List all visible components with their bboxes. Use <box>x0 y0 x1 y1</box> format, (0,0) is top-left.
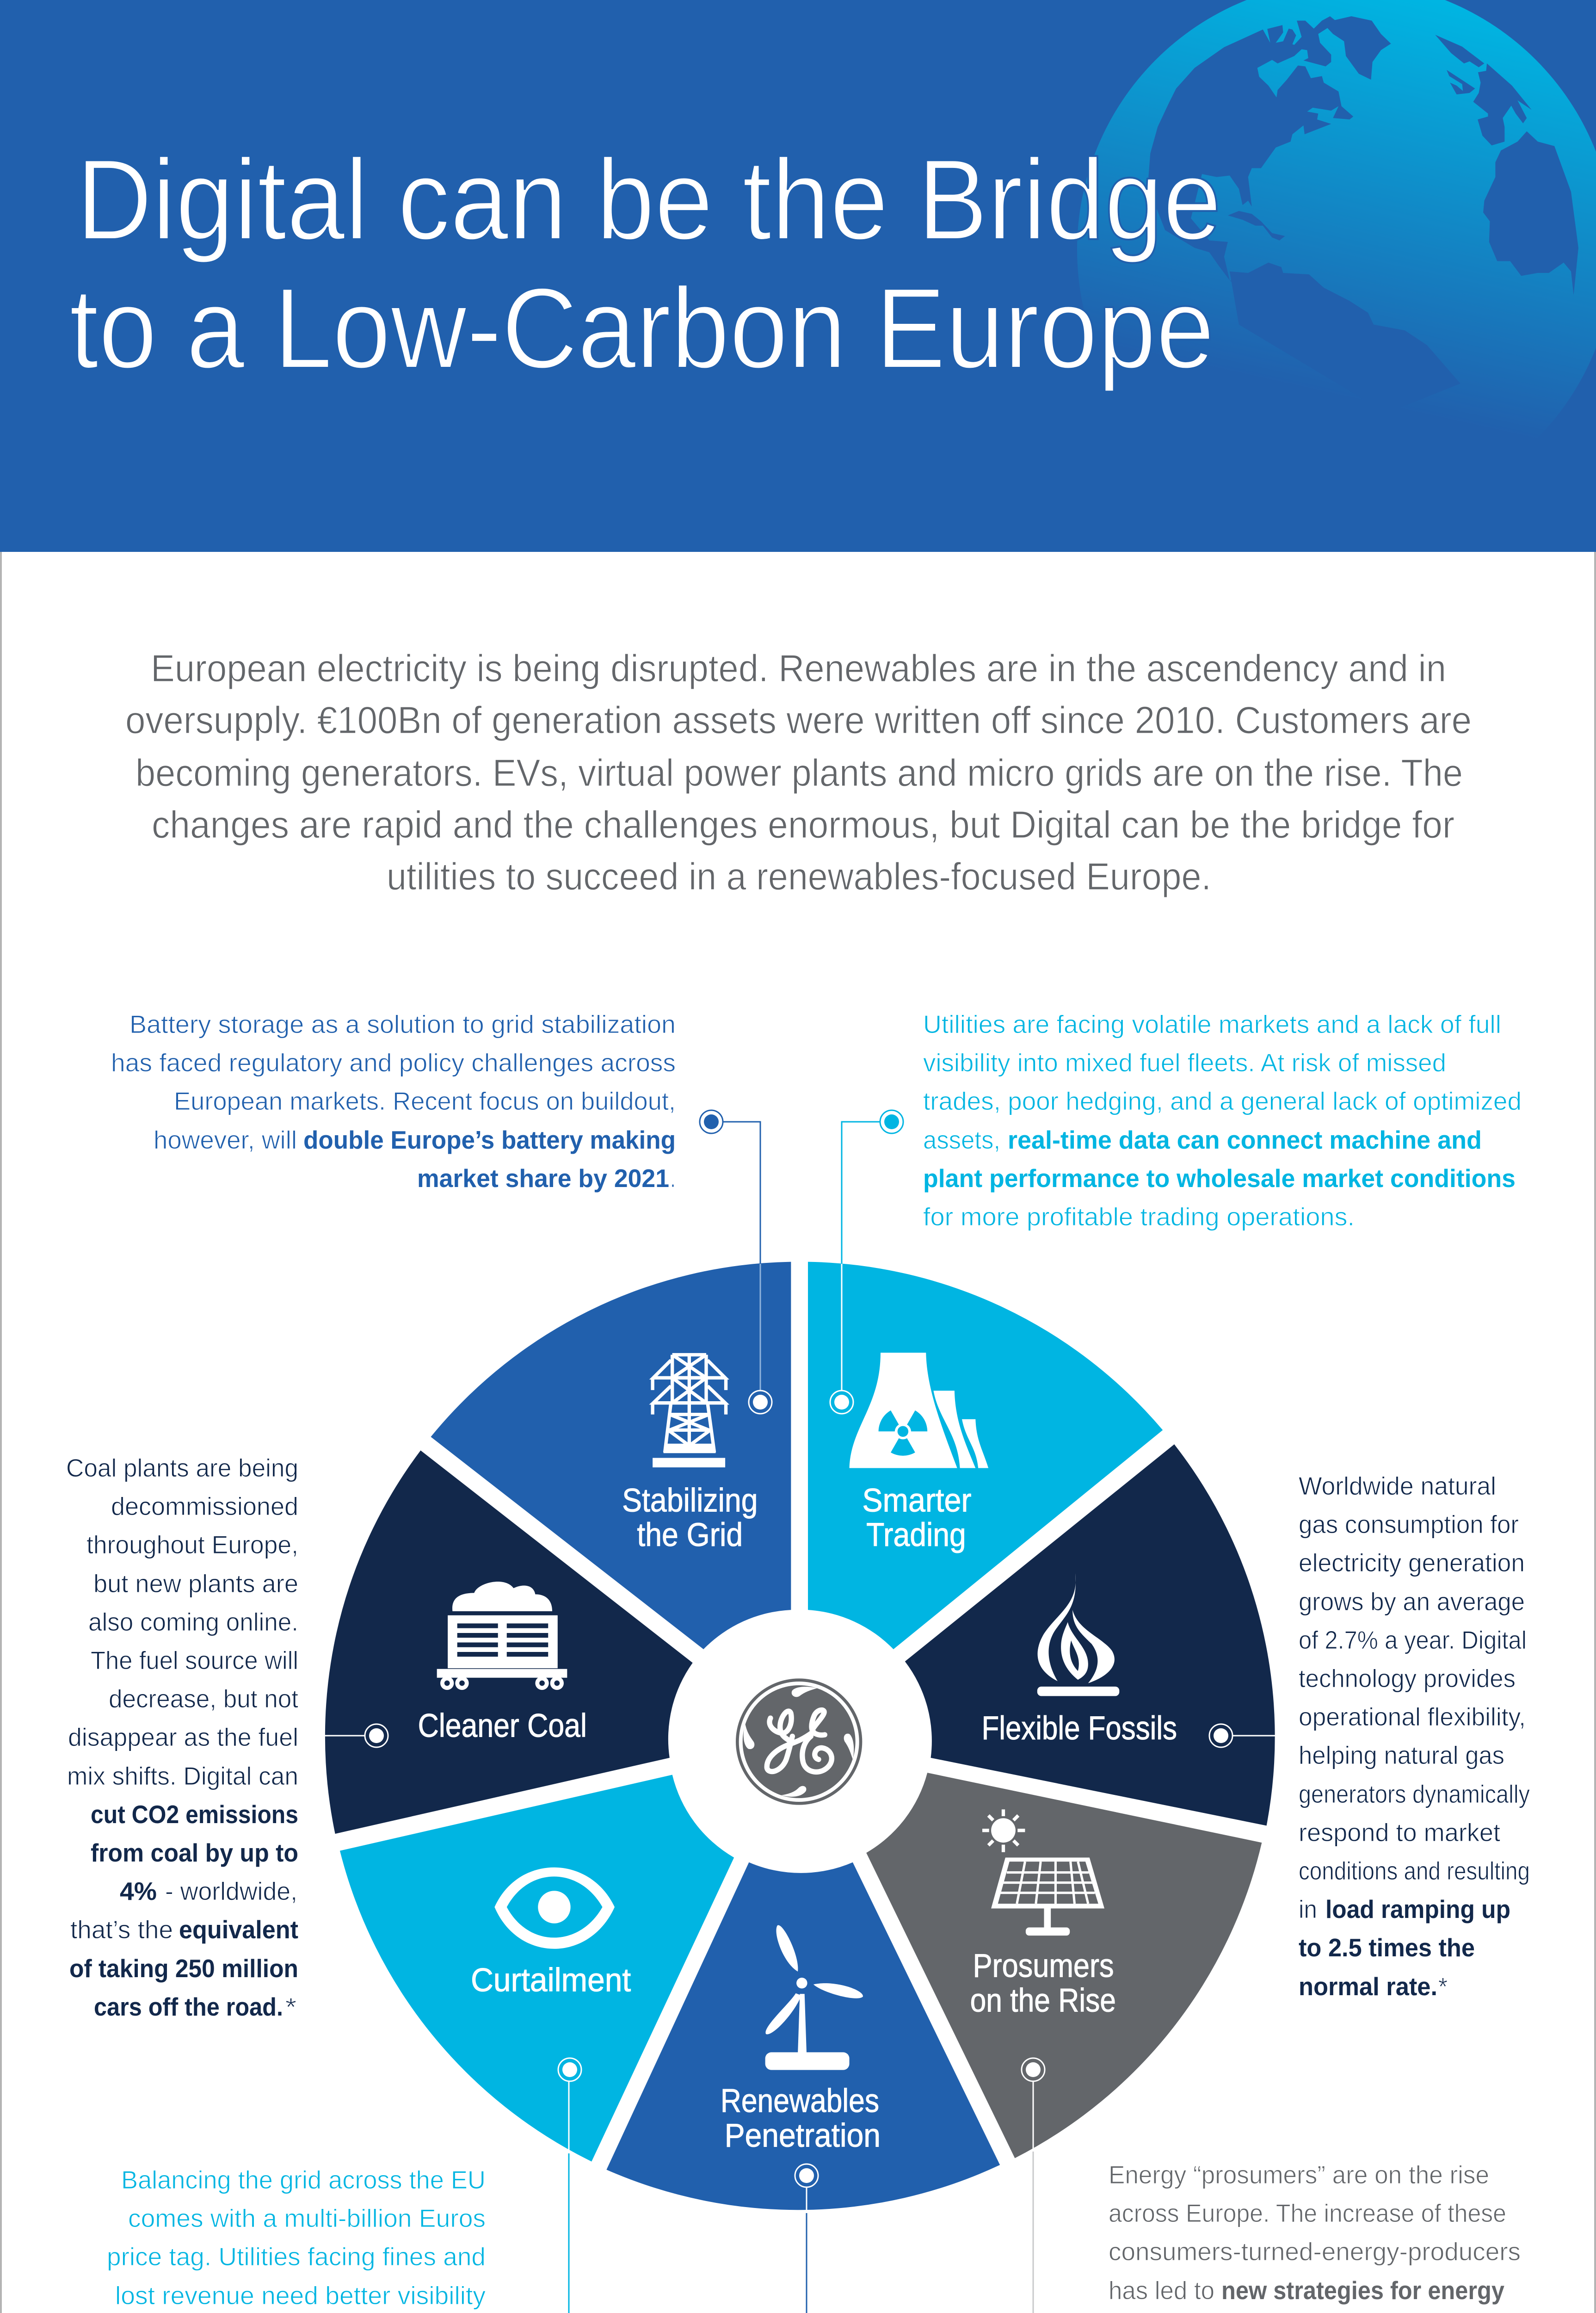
label: Prosumers <box>973 1948 1114 1985</box>
label: Cleaner Coal <box>418 1707 587 1744</box>
icon: eye <box>494 1868 615 1949</box>
text block: smarter trading: real-time data can connect machine and <box>1008 1126 1482 1154</box>
icon: coal rail car <box>437 1582 567 1690</box>
text block: flexible fossils: operational flexibility, <box>1299 1702 1526 1731</box>
page side borders <box>0 552 1596 2313</box>
icon: globe <box>1077 0 1596 407</box>
intro text: changes are rapid and the challenges enormous, but Digital can be the bridge for <box>152 803 1454 846</box>
text block: cleaner coal: * <box>285 1992 296 2021</box>
text block: smarter trading: plant performance to wholesale market conditions <box>923 1164 1516 1193</box>
text block: cleaner coal: that’s the <box>70 1915 173 1944</box>
text block: prosumers on the rise: new strategies for energy <box>1221 2276 1504 2305</box>
pie chart: seven digital segments <box>325 1262 1275 2210</box>
text block: flexible fossils: conditions and resulting <box>1299 1856 1530 1885</box>
label <box>721 2083 881 2154</box>
text block: prosumers on the rise: across Europe. The increase of these <box>1109 2199 1506 2227</box>
label: Renewables <box>721 2083 879 2120</box>
label: on the Rise <box>970 1982 1116 2019</box>
text block: flexible fossils: in <box>1299 1895 1317 1923</box>
label: the Grid <box>637 1516 743 1553</box>
text block: cleaner coal: The fuel source will <box>91 1646 298 1675</box>
label: Penetration <box>725 2117 881 2154</box>
segment: smarter trading <box>808 1262 1163 1649</box>
text block: cleaner coal: cut CO2 emissions <box>91 1800 298 1829</box>
icon: gas flame <box>1037 1573 1119 1696</box>
text block: cleaner coal: of taking 250 million <box>69 1954 298 1983</box>
segment: renewables penetration <box>606 1862 1000 2210</box>
text block: flexible fossils: of 2.7% a year. Digital <box>1299 1626 1527 1654</box>
text block: flexible fossils: normal rate. <box>1299 1972 1437 2001</box>
connector: smarter trading <box>830 1110 903 1414</box>
text block: cleaner coal: equivalent <box>179 1915 298 1944</box>
label: Flexible Fossils <box>982 1710 1177 1747</box>
connector: cleaner coal <box>324 1724 388 1747</box>
segment: curtailment <box>340 1775 734 2162</box>
text block: flexible fossils: electricity generation <box>1299 1548 1525 1577</box>
text block: stabilizing the grid: however, will <box>154 1126 297 1154</box>
text block: flexible fossils: helping natural gas <box>1299 1741 1504 1769</box>
text block: flexible fossils: generators dynamically <box>1299 1780 1530 1808</box>
title: Digital can be the Bridge <box>76 135 1221 264</box>
text block: flexible fossils <box>1299 1472 1530 2001</box>
text block: cleaner coal: but new plants are <box>93 1569 298 1598</box>
text block: prosumers on the rise: has led to <box>1109 2276 1214 2305</box>
text block: smarter trading: assets, <box>923 1126 1000 1154</box>
text block: flexible fossils: Worldwide natural <box>1299 1472 1496 1500</box>
icon: nuclear cooling towers <box>850 1353 988 1468</box>
segment: stabilizing the grid <box>431 1262 791 1649</box>
text block: flexible fossils: load ramping up <box>1325 1895 1510 1923</box>
label: Trading <box>866 1516 966 1553</box>
text block: flexible fossils: technology provides <box>1299 1664 1516 1693</box>
text block: stabilizing the grid: double Europe’s battery making <box>303 1126 676 1154</box>
text block: cleaner coal: - worldwide, <box>165 1877 297 1905</box>
text block: curtailment: comes with a multi-billion Euros <box>128 2204 486 2233</box>
text block: stabilizing the grid: European markets. Recent focus on buildout, <box>174 1087 676 1115</box>
text block: stabilizing the grid: market share by 2021 <box>417 1164 669 1193</box>
connector: flexible fossils <box>1209 1724 1276 1747</box>
segment: flexible fossils <box>905 1444 1275 1826</box>
text block: stabilizing the grid: has faced regulatory and policy challenges across <box>111 1048 676 1077</box>
text block: cleaner coal: Coal plants are being <box>66 1453 298 1482</box>
text block: cleaner coal: 4% <box>120 1877 157 1905</box>
segment: prosumers on the rise <box>866 1773 1262 2158</box>
text block: cleaner coal <box>66 1453 298 2021</box>
text block: smarter trading <box>923 1010 1522 1231</box>
connector: renewables penetration <box>795 2164 818 2313</box>
text block: prosumers on the rise: consumers-turned-energy-producers <box>1109 2237 1521 2266</box>
label: Smarter <box>862 1482 972 1519</box>
label: Stabilizing <box>622 1482 758 1519</box>
label: Curtailment <box>471 1961 631 1998</box>
text block: flexible fossils: to 2.5 times the <box>1299 1933 1475 1962</box>
segment: cleaner coal <box>325 1450 693 1834</box>
text block: flexible fossils: gas consumption for <box>1299 1510 1519 1539</box>
connector: prosumers on the rise <box>1022 2058 1095 2313</box>
text block: flexible fossils: respond to market <box>1299 1818 1500 1847</box>
text block: cleaner coal: decommissioned <box>111 1492 298 1521</box>
text block: stabilizing the grid: Battery storage as a solution to grid stabilization <box>129 1010 676 1039</box>
text block: smarter trading: visibility into mixed fuel fleets. At risk of missed <box>923 1048 1446 1077</box>
label <box>862 1482 972 1553</box>
intro text <box>125 647 1472 898</box>
text block: flexible fossils: grows by an average <box>1299 1587 1525 1616</box>
text block: smarter trading: trades, poor hedging, and a general lack of optimized <box>923 1087 1522 1115</box>
text block: curtailment: lost revenue need better visibility <box>115 2281 486 2310</box>
text block: stabilizing the grid <box>111 1010 676 1193</box>
text block: cleaner coal: also coming online. <box>88 1608 298 1636</box>
text block: curtailment: Balancing the grid across the EU <box>121 2165 486 2194</box>
text block: stabilizing the grid: . <box>670 1164 676 1193</box>
intro text: utilities to succeed in a renewables-focused Europe. <box>387 855 1211 898</box>
text block: cleaner coal: cars off the road. <box>94 1992 283 2021</box>
text block: prosumers on the rise: Energy “prosumers” are on the rise <box>1109 2160 1489 2189</box>
icon: transmission tower <box>653 1355 726 1467</box>
text block: curtailment <box>68 2165 486 2313</box>
text block: smarter trading: for more profitable trading operations. <box>923 1202 1355 1231</box>
text block: cleaner coal: from coal by up to <box>91 1838 298 1867</box>
title <box>69 135 1221 392</box>
text block: cleaner coal: decrease, but not <box>109 1684 298 1713</box>
header band <box>0 0 1596 552</box>
label <box>622 1482 758 1553</box>
GE logo: centre of pie <box>736 1678 862 1805</box>
intro text: oversupply. €100Bn of generation assets were written off since 2010. Customers are <box>125 699 1472 742</box>
icon: sun and solar panel <box>982 1809 1104 1936</box>
text block: flexible fossils: * <box>1438 1972 1448 2001</box>
connector: curtailment <box>509 2058 581 2313</box>
connector: stabilizing the grid <box>700 1110 772 1414</box>
icon: wind turbine <box>765 1925 863 2070</box>
label <box>970 1948 1116 2019</box>
text block: cleaner coal: disappear as the fuel <box>68 1723 298 1751</box>
text block: prosumers on the rise <box>1109 2160 1525 2313</box>
text block: curtailment: price tag. Utilities facing fines and <box>107 2242 486 2271</box>
text block: cleaner coal: throughout Europe, <box>86 1530 298 1559</box>
text block: smarter trading: Utilities are facing volatile markets and a lack of full <box>923 1010 1501 1039</box>
title: to a Low-Carbon Europe <box>69 264 1214 392</box>
intro text: European electricity is being disrupted. Renewables are in the ascendency and in <box>151 647 1446 690</box>
text block: cleaner coal: mix shifts. Digital can <box>67 1762 298 1790</box>
intro text: becoming generators. EVs, virtual power plants and micro grids are on the rise. The <box>136 751 1463 794</box>
